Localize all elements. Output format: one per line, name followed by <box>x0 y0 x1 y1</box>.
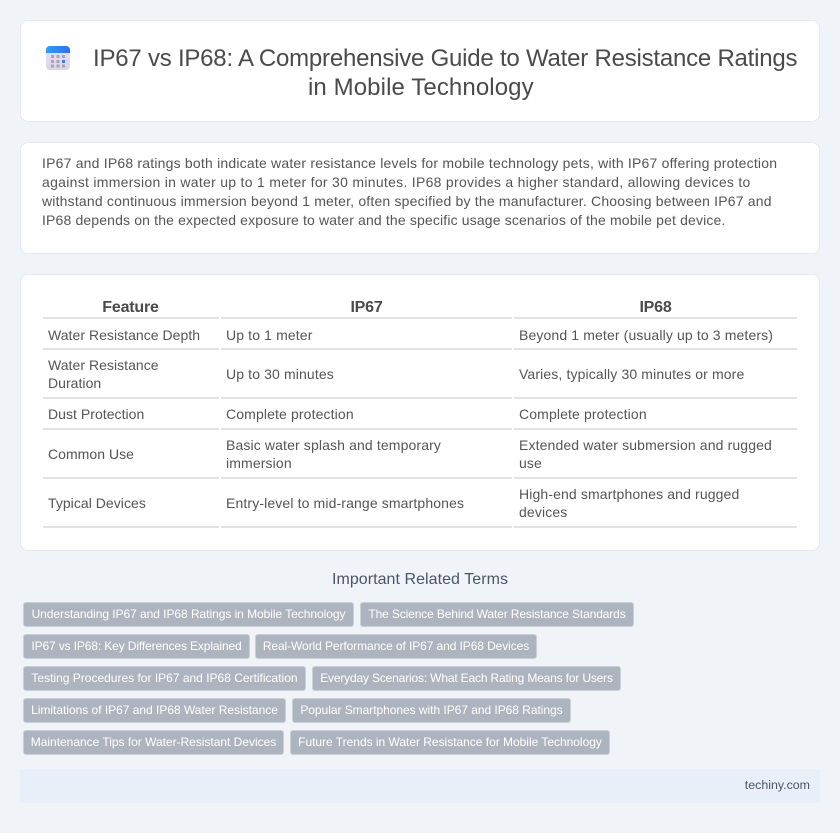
row: water resistance duration: Water Resistance <box>48 357 159 373</box>
row: water resistance depth <box>48 327 773 343</box>
row: common use: use <box>519 455 542 471</box>
tag: Popular Smartphones with IP67 and IP68 Ratings <box>300 703 563 717</box>
tag: Maintenance Tips for Water-Resistant Devices <box>31 735 276 749</box>
tag: The Science Behind Water Resistance Standards <box>368 607 626 621</box>
row: dust protection: Complete protection <box>226 406 354 422</box>
row: typical devices: devices <box>519 504 567 520</box>
intro paragraph: IP68 depends on the expected exposure to water and the specific usage scenarios of the mobile pet device. <box>42 212 726 228</box>
table header: Feature <box>102 299 159 316</box>
title: IP67 vs IP68: A Comprehensive Guide to Water Resistance Ratings <box>93 45 797 72</box>
intro paragraph: IP67 and IP68 ratings both indicate water resistance levels for mobile technology pets, with IP67 offering protection <box>42 155 777 171</box>
row: dust protection <box>48 406 647 422</box>
tag: Real-World Performance of IP67 and IP68 Devices <box>263 639 529 653</box>
footer source: techiny.com <box>745 778 810 792</box>
tag: IP67 vs IP68: Key Differences Explained <box>31 639 242 653</box>
row: water resistance duration <box>48 357 744 391</box>
tag <box>292 698 571 723</box>
title <box>93 45 797 101</box>
tag: Testing Procedures for IP67 and IP68 Certification <box>31 671 298 685</box>
tag <box>23 730 284 755</box>
panel: comparison table <box>20 274 820 551</box>
footer <box>20 769 820 803</box>
tag <box>312 666 621 691</box>
row: water resistance duration: Up to 30 minutes <box>226 366 334 382</box>
table header <box>102 299 672 316</box>
row: water resistance duration: Duration <box>48 375 101 391</box>
row: typical devices: High-end smartphones and rugged <box>519 486 739 502</box>
panel: header <box>20 20 820 122</box>
tag <box>360 602 634 627</box>
intro paragraph: withstand continuous immersion beyond 1 meter, often specified by the manufacturer. Choosing between IP67 and <box>42 193 772 209</box>
row: typical devices: Typical Devices <box>48 495 146 511</box>
heading: important related terms: Important Related Terms <box>332 571 508 588</box>
icon: calendar <box>46 46 70 70</box>
row: common use: immersion <box>226 455 292 471</box>
intro paragraph: against immersion in water up to 1 meter for 30 minutes. IP68 provides a higher standard, allowing devices to <box>42 174 751 190</box>
row: water resistance depth: Water Resistance Depth <box>48 327 200 343</box>
title: in Mobile Technology <box>308 74 534 101</box>
row: common use: Common Use <box>48 446 134 462</box>
table header: IP68 <box>639 299 672 316</box>
tag: Understanding IP67 and IP68 Ratings in Mobile Technology <box>32 607 345 621</box>
intro paragraph <box>42 155 777 228</box>
row: water resistance depth: Up to 1 meter <box>226 327 313 343</box>
row: common use: Extended water submersion and rugged <box>519 437 772 453</box>
table header: IP67 <box>350 299 383 316</box>
tag <box>23 602 354 627</box>
row: typical devices <box>48 486 739 520</box>
tag <box>23 634 250 659</box>
row: water resistance depth: Beyond 1 meter (usually up to 3 meters) <box>519 327 773 343</box>
row: water resistance duration: Varies, typically 30 minutes or more <box>519 366 744 382</box>
tag <box>23 698 286 723</box>
row: typical devices: Entry-level to mid-range smartphones <box>226 495 464 511</box>
tag <box>255 634 537 659</box>
tag <box>23 666 306 691</box>
tag: Limitations of IP67 and IP68 Water Resistance <box>31 703 278 717</box>
panel: related term tags <box>23 602 634 755</box>
row: common use: Basic water splash and temporary <box>226 437 441 453</box>
tag: Everyday Scenarios: What Each Rating Means for Users <box>320 671 613 685</box>
row: dust protection: Dust Protection <box>48 406 144 422</box>
tag <box>290 730 610 755</box>
panel: intro text <box>20 142 820 254</box>
row: dust protection: Complete protection <box>519 406 647 422</box>
tag: Future Trends in Water Resistance for Mobile Technology <box>298 735 602 749</box>
row: common use <box>48 437 772 471</box>
